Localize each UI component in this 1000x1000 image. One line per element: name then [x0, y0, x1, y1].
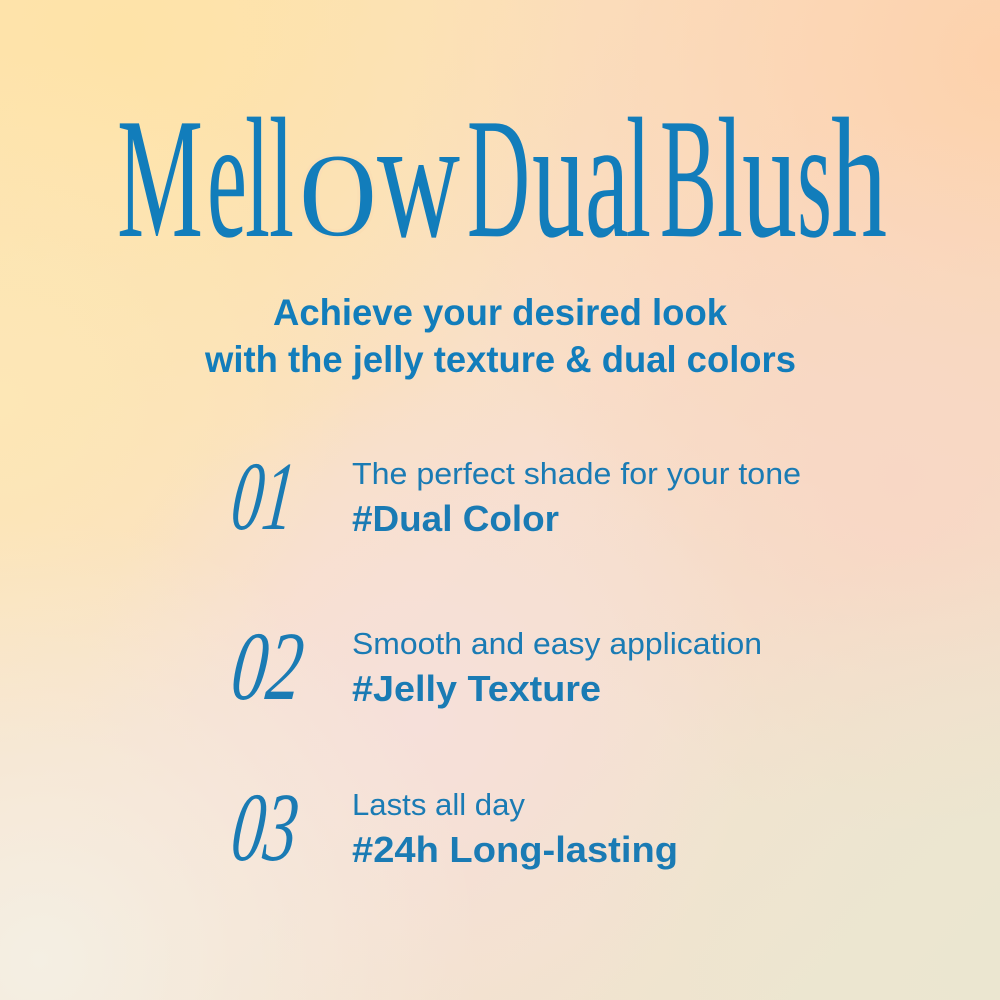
title: u — [742, 84, 797, 274]
item 03 description: Lasts all day — [352, 787, 525, 822]
item 01 — [227, 442, 801, 551]
item 02 — [227, 612, 762, 721]
subtitle: Achieve your desired look — [273, 291, 727, 333]
title — [117, 84, 887, 274]
item 02 hashtag: #Jelly Texture — [352, 668, 601, 709]
title: o — [296, 84, 380, 274]
title: l — [626, 84, 651, 274]
number 01: 01 — [227, 442, 301, 551]
title: a — [585, 84, 629, 274]
item 03 hashtag: #24h Long-lasting — [352, 829, 678, 870]
title: w — [377, 84, 460, 274]
title: l — [245, 84, 270, 274]
title: l — [269, 84, 294, 274]
item 01 hashtag: #Dual Color — [352, 498, 559, 539]
title: h — [831, 84, 887, 274]
subtitle — [204, 291, 796, 380]
title: M — [117, 84, 203, 274]
title: s — [797, 84, 832, 274]
title: l — [717, 84, 743, 274]
title: u — [532, 84, 585, 274]
number 03: 03 — [227, 773, 304, 882]
number 02: 02 — [227, 612, 309, 721]
title: B — [660, 84, 717, 274]
subtitle: with the jelly texture & dual colors — [204, 338, 796, 380]
title: e — [207, 84, 247, 274]
item 02 description: Smooth and easy application — [352, 626, 762, 661]
item 03 — [227, 773, 678, 882]
title: D — [467, 84, 530, 274]
item 01 description: The perfect shade for your tone — [352, 456, 801, 491]
